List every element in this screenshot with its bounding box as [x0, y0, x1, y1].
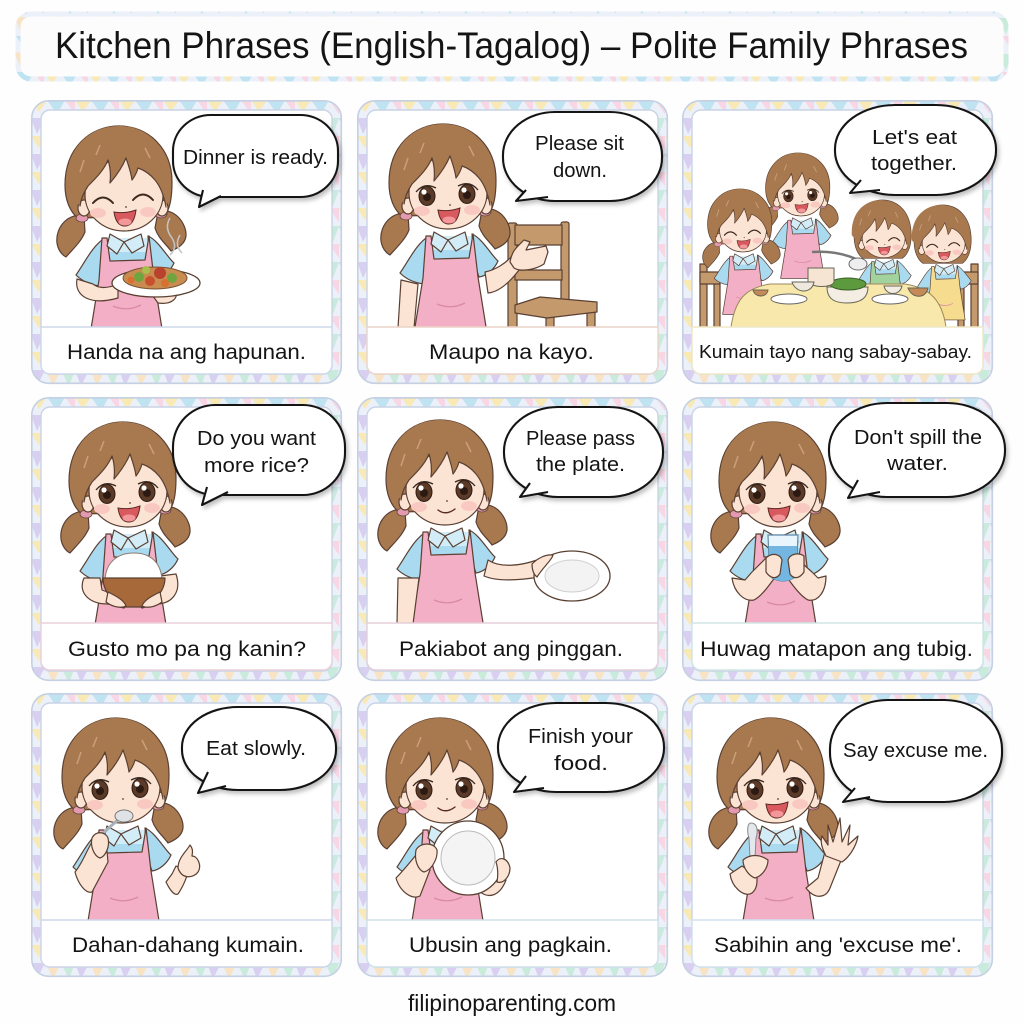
caption: Ubusin ang pagkain: Ubusin ang pagkain. — [409, 934, 612, 957]
caption box — [692, 920, 983, 967]
panel: say excuse me — [683, 694, 1002, 976]
panel: please sit down — [358, 101, 667, 383]
girl waving and saying excuse me — [709, 718, 858, 927]
girl showing empty plate — [378, 718, 510, 927]
caption: Kumain tayo nang sabay-sabay: Kumain tayo nang sabay-sabay. — [699, 342, 972, 362]
speech bubble: Please pass the plate — [504, 407, 663, 497]
caption box — [692, 623, 983, 670]
panel: dinner is ready — [32, 101, 341, 383]
speech bubble: Say excuse me: Say excuse me. — [843, 740, 988, 762]
caption: Gusto mo pa ng kanin: Gusto mo pa ng kanin? — [68, 638, 306, 661]
wooden chair — [508, 222, 597, 328]
speech bubble: Please pass the plate: Please pass — [526, 428, 635, 450]
speech bubble: Finish your food: food. — [554, 753, 608, 775]
caption box — [41, 327, 332, 374]
girl holding glass of water — [711, 422, 840, 631]
footer website: filipinoparenting.com — [408, 990, 616, 1016]
speech bubble: Finish your food — [498, 703, 664, 792]
caption: Maupo na kayo: Maupo na kayo. — [429, 341, 594, 364]
caption: Huwag matapon ang tubig: Huwag matapon ang tubig. — [700, 638, 973, 661]
caption box — [367, 920, 658, 967]
girl gesturing to chair — [381, 124, 548, 333]
panel: let's eat together — [683, 101, 996, 383]
speech bubble: Finish your food: Finish your — [528, 726, 633, 748]
caption box — [692, 327, 983, 374]
girl passing plate — [378, 420, 610, 629]
caption box — [41, 623, 332, 670]
caption box — [41, 920, 332, 967]
speech bubble: Let's eat together: together. — [871, 153, 957, 175]
caption box — [367, 327, 658, 374]
speech bubble: Let's eat together: Let's eat — [872, 127, 957, 149]
panel: please pass the plate — [358, 398, 667, 680]
family at dinner table — [700, 153, 978, 328]
panel: don't spill the water — [683, 398, 1005, 680]
caption: Dahan-dahang kumain: Dahan-dahang kumain. — [72, 934, 304, 957]
speech bubble: Dinner is ready: Dinner is ready. — [183, 147, 328, 169]
title banner — [18, 14, 1006, 79]
speech bubble: Do you want more rice: Do you want — [197, 428, 316, 450]
panel: finish your food — [358, 694, 667, 976]
speech bubble: Please sit down: down. — [553, 160, 607, 182]
speech bubble: Please sit down: Please sit — [535, 133, 624, 155]
speech bubble: Please sit down — [503, 112, 662, 201]
speech bubble: Do you want more rice — [173, 405, 345, 505]
speech bubble: Don't spill the water: water. — [886, 453, 948, 475]
speech bubble: Dinner is ready — [173, 115, 338, 207]
speech bubble: Let's eat together — [835, 105, 996, 195]
speech bubble: Say excuse me — [830, 700, 1002, 802]
panel: more rice — [32, 398, 345, 680]
caption: Sabihin ang 'excuse me': Sabihin ang 'excuse me'. — [714, 934, 962, 957]
speech bubble: Please pass the plate: the plate. — [536, 454, 625, 476]
speech bubble: Don't spill the water — [829, 403, 1005, 498]
girl eating with spoon — [54, 718, 200, 927]
speech bubble: Do you want more rice: more rice? — [204, 455, 309, 477]
panel: eat slowly — [32, 694, 341, 976]
caption: Pakiabot ang pinggan: Pakiabot ang pinggan. — [399, 638, 623, 661]
caption: Handa na ang hapunan: Handa na ang hapunan. — [67, 341, 306, 364]
title text: Kitchen Phrases (English-Tagalog) – Polite Family Phrases — [55, 25, 968, 66]
girl holding plate of food — [57, 126, 200, 335]
girl holding rice bowl — [61, 422, 190, 631]
speech bubble: Eat slowly: Eat slowly. — [206, 738, 306, 760]
speech bubble: Don't spill the water: Don't spill the — [854, 427, 982, 449]
caption box — [367, 623, 658, 670]
speech bubble: Eat slowly — [182, 707, 336, 793]
